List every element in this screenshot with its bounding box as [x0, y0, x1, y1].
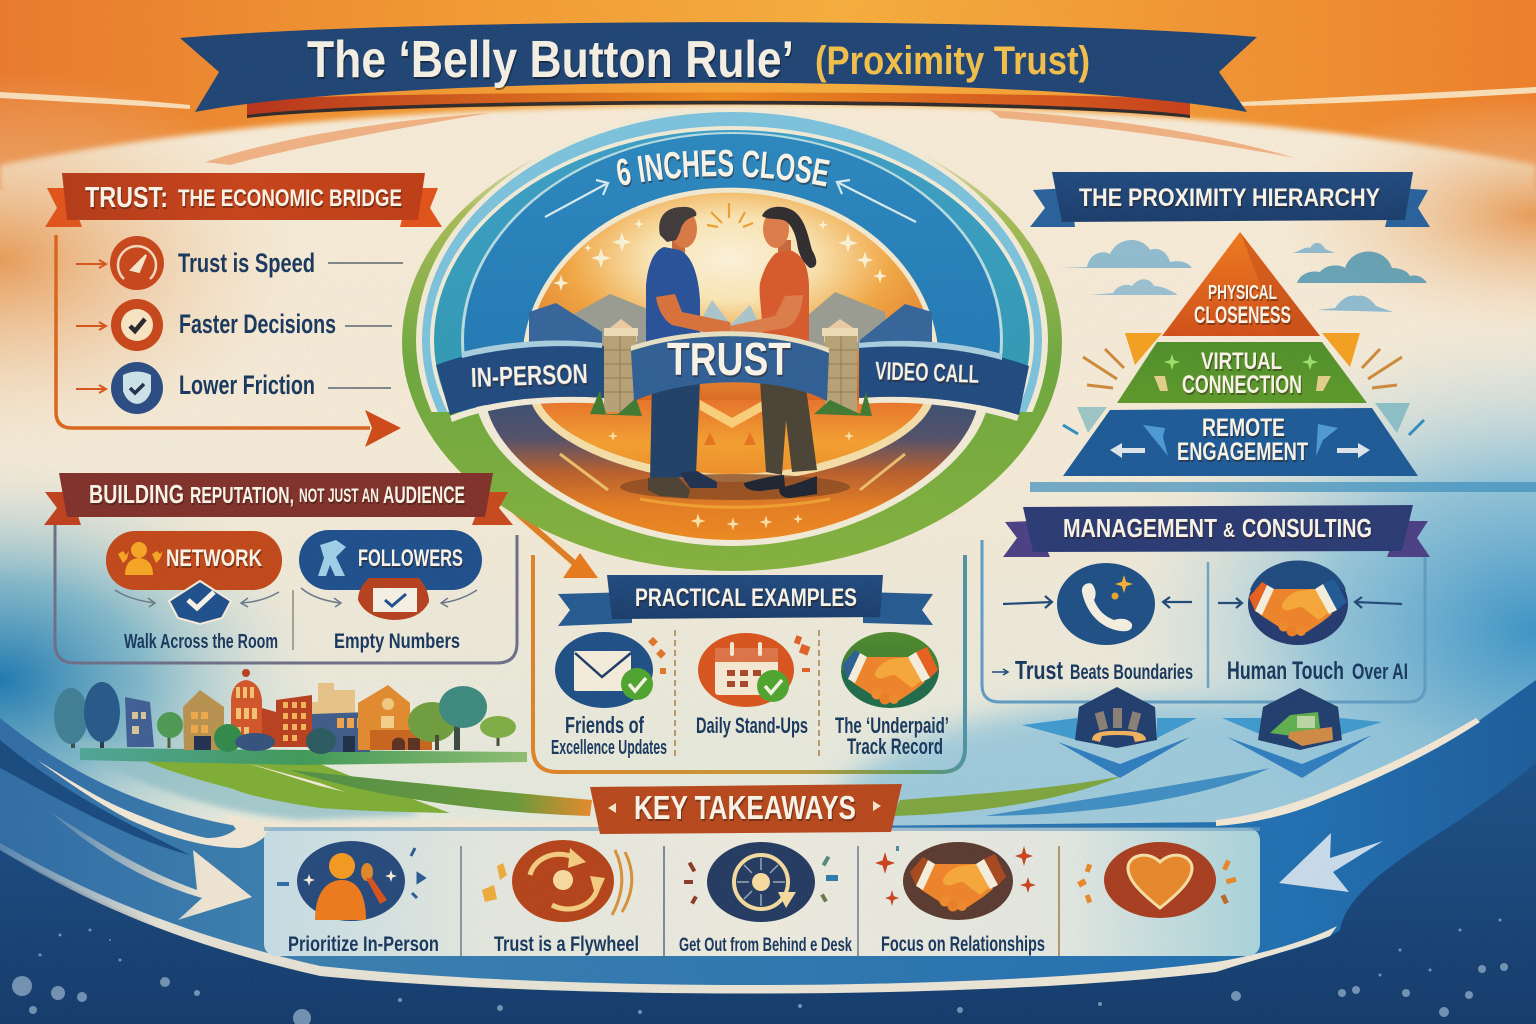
- illustration: town: [54, 669, 527, 765]
- banner: proximity hierarchy: THE PROXIMITY HIERARCHY: [1079, 184, 1380, 212]
- item: trust is speed: Trust is Speed: [178, 248, 315, 278]
- banner: building reputation: BUILDING: [89, 479, 184, 509]
- badge: network: NETWORK: [166, 545, 263, 572]
- example: underpaid track record: Track Record: [847, 734, 943, 759]
- lower rings: [445, 396, 1020, 547]
- pyramid: remote engagement: ENGAGEMENT: [1177, 438, 1308, 466]
- icon: handshake: [1218, 560, 1402, 645]
- banner: proximity hierarchy: [1030, 172, 1430, 227]
- pyramid: virtual connection: CONNECTION: [1182, 371, 1302, 399]
- medallion heading: [544, 150, 916, 223]
- takeaway: focus on relationships: Focus on Relationships: [881, 933, 1045, 956]
- label: trust beats boundaries: [992, 655, 1193, 685]
- takeaway: get out from behind desk: [679, 842, 852, 956]
- banner: trust: THE ECONOMIC BRIDGE: [178, 185, 402, 212]
- banner: management: CONSULTING: [1242, 513, 1372, 543]
- panel: practical examples: [533, 555, 965, 772]
- trust ribbon: TRUST: [667, 333, 791, 385]
- pyramid: virtual connection: VIRTUAL: [1201, 348, 1282, 375]
- arrow: left white arrow: [50, 812, 252, 920]
- takeaway: prioritize in-person: [277, 841, 439, 956]
- takeaway: trust is a flywheel: Trust is a Flywheel: [494, 933, 639, 956]
- title text: The ‘Belly Button Rule’: [307, 31, 794, 89]
- man: [646, 207, 732, 498]
- ribbon: video call: [859, 341, 1029, 421]
- banner: building reputation: NOT JUST AN: [299, 486, 379, 507]
- badge: followers: [299, 530, 482, 620]
- banner: key takeaways: KEY TAKEAWAYS: [634, 789, 856, 826]
- ribbon: video call: VIDEO CALL: [875, 357, 980, 389]
- blue strip under pyramid: [1030, 482, 1536, 492]
- side triangles: [1125, 333, 1162, 365]
- sunset scene: [522, 188, 939, 400]
- chevrons and badges: [1022, 687, 1382, 778]
- pyramid: physical closeness: PHYSICAL: [1208, 282, 1277, 304]
- trust ribbon: [631, 331, 829, 401]
- banner: trust: TRUST:: [85, 182, 168, 214]
- banner: trust: [45, 173, 442, 227]
- label: human touch over ai: Human Touch: [1227, 657, 1344, 685]
- ribbon: in-person: IN-PERSON: [470, 358, 588, 393]
- example: underpaid track record: The ‘Underpaid’: [835, 713, 949, 738]
- stone pillars: [590, 319, 872, 416]
- badge: followers: FOLLOWERS: [358, 545, 463, 572]
- mountains: [570, 294, 660, 345]
- banner: practical examples: PRACTICAL EXAMPLES: [635, 584, 857, 612]
- pyramid: virtual connection: [1117, 342, 1367, 403]
- medallion heading: 6 INCHES CLOSE: [617, 150, 831, 188]
- banner: building reputation: AUDIENCE: [383, 482, 465, 509]
- panel: key takeaways: [264, 784, 1260, 958]
- example: underpaid track record: [835, 632, 949, 759]
- panel: proximity hierarchy: [1030, 172, 1430, 476]
- banner: management: MANAGEMENT: [1063, 513, 1217, 543]
- label: empty numbers: Empty Numbers: [334, 630, 460, 653]
- title subtitle: (Proximity Trust): [815, 39, 1090, 83]
- speckles: [12, 918, 1508, 1024]
- example: friends of excellence: Excellence Updates: [551, 737, 667, 759]
- example: friends of excellence: [551, 632, 667, 759]
- green outer ring: [402, 113, 1062, 571]
- banner: building reputation: [44, 473, 513, 525]
- pyramid: physical closeness: CLOSENESS: [1194, 302, 1291, 329]
- banner: building reputation: REPUTATION,: [190, 482, 294, 508]
- takeaway: get out from behind desk: Get Out from Behind e Desk: [679, 935, 852, 956]
- banner: key takeaways: [590, 784, 902, 834]
- item: faster decisions: [76, 299, 392, 351]
- banner: practical examples: [558, 575, 933, 626]
- pyramid: physical closeness: [1162, 232, 1320, 336]
- icon: phone: [1003, 563, 1192, 645]
- panel: trust economic bridge: [45, 173, 442, 447]
- pyramid: remote engagement: REMOTE: [1202, 414, 1285, 442]
- takeaway: focus on relationships: [875, 842, 1045, 956]
- example: daily stand-ups: [696, 633, 810, 738]
- lower blue swoosh field: [0, 680, 1536, 1024]
- takeaway: heart: [1077, 842, 1237, 918]
- banner: management: &: [1223, 520, 1235, 542]
- central medallion: [402, 108, 1062, 578]
- example: friends of excellence: Friends of: [565, 712, 644, 738]
- label: walk across the room: Walk Across the Room: [124, 631, 278, 653]
- arrow: bridge to practical examples: [497, 495, 598, 578]
- title banner: [180, 22, 1257, 118]
- upper blue rings: [416, 108, 1048, 412]
- label: trust beats boundaries: Beats Boundaries: [1070, 661, 1193, 684]
- takeaway: trust is a flywheel: [482, 840, 639, 956]
- panel: management and consulting: [982, 505, 1430, 778]
- item: lower friction: [76, 362, 391, 414]
- label: human touch over ai: Over AI: [1352, 659, 1408, 684]
- arrow: right pale arrow: [1279, 833, 1383, 892]
- item: faster decisions: Faster Decisions: [179, 309, 336, 339]
- takeaway: prioritize in-person: Prioritize In-Person: [288, 933, 439, 956]
- example: daily stand-ups: Daily Stand-Ups: [696, 713, 808, 738]
- label: trust beats boundaries: Trust: [1015, 655, 1063, 685]
- woman: [730, 207, 817, 498]
- clouds: [1060, 240, 1427, 312]
- badge: network: [106, 531, 282, 624]
- ribbon: in-person: [436, 340, 604, 422]
- green swooshes: [143, 760, 1270, 816]
- small arrows: [115, 588, 477, 607]
- pyramid: remote engagement: [1063, 408, 1418, 476]
- item: lower friction: Lower Friction: [179, 370, 315, 400]
- banner: management: [1003, 505, 1430, 557]
- item: trust is speed: [76, 236, 403, 290]
- panel: building reputation: [44, 473, 517, 663]
